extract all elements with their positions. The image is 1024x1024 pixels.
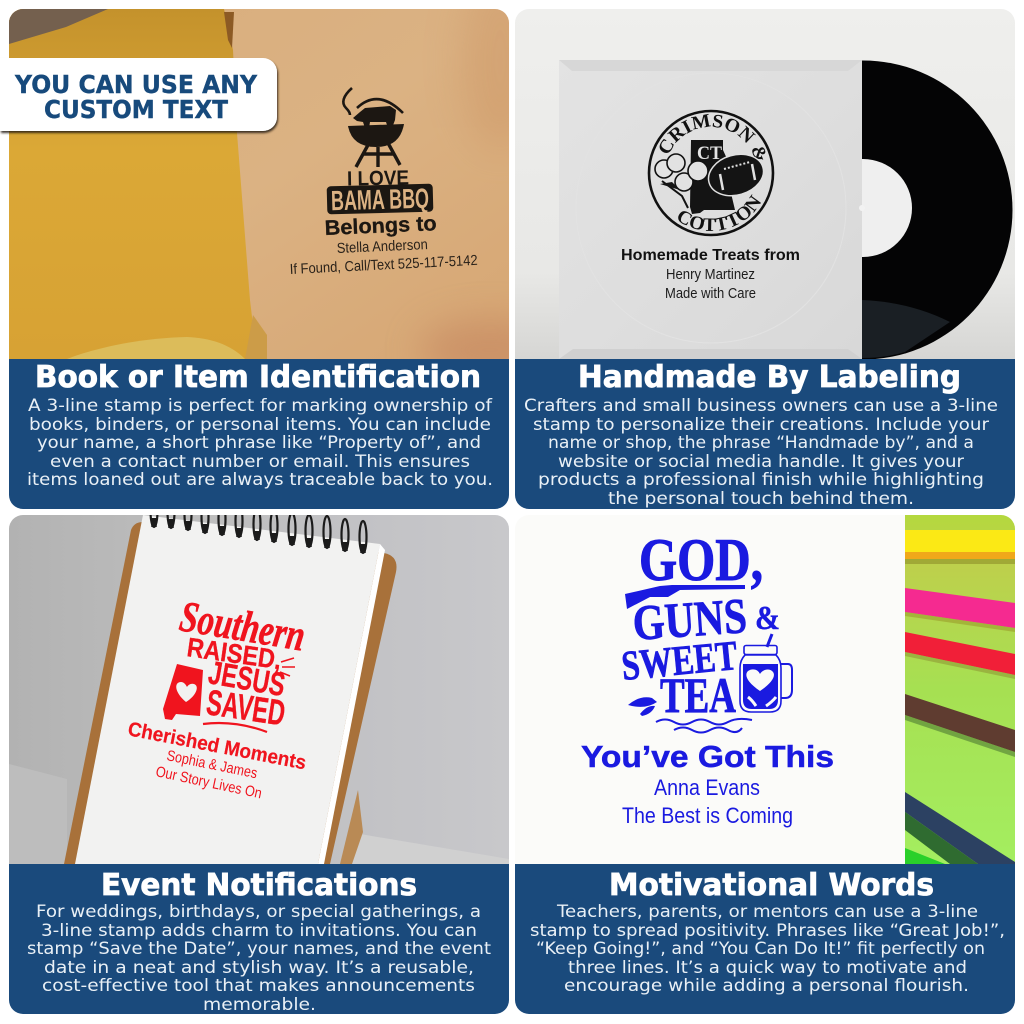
caption box: handmade by labeling: name or shop, the phrase “Handmade by”, and a [548,433,974,452]
stamp: phone line: If Found, Call/Text 525-117-5142 [289,253,478,278]
stamp: God Guns and Sweet Tea logo: SWEET [620,633,739,690]
caption box: motivational words: Teachers, parents, or mentors can use a 3-line [556,902,978,921]
stamp: Cherished Moments: Cherished Moments [126,718,308,774]
stamp: I LOVE: I LOVE [347,166,409,191]
stamp: Crimson and Cotton seal: CRIMSON & [660,114,766,160]
stamp: BBQ grill logo [343,88,404,167]
caption box: motivational words [515,864,1015,1014]
caption box: event notifications: For weddings, birthdays, or special gatherings, a [36,902,481,921]
caption box: event notifications: stamp “Save the Date”, your names, and the event [27,939,492,958]
caption box: handmade by labeling: Crafters and small business owners can use a 3-line [524,396,998,415]
stamp: Crimson and Cotton seal: COTTTON [678,194,761,231]
panel: handmade by labeling [515,9,1015,509]
caption box: motivational words: three lines. It’s a quick way to motivate and [568,958,967,977]
caption box: motivational words: stamp to spread positivity. Phrases like “Great Job!”, [530,921,1005,940]
stamp: Our Story Lives On: Our Story Lives On [154,763,263,802]
photo: white paper with coloured pencils [581,515,1015,864]
caption box: book or item identification: Book or Item Identification [35,360,481,395]
stamp: You've Got This: You’ve Got This [581,739,834,774]
stamp: Homemade Treats from: Homemade Treats from [621,247,800,264]
stamp: Southern Raised Jesus Saved logo [163,602,304,733]
caption box: handmade by labeling: stamp to personalize their creations. Include your [533,415,989,434]
stamp: The Best is Coming: The Best is Coming [622,803,793,828]
stamp: Crimson and Cotton seal: CT [697,143,722,164]
caption box: book or item identification: your name, a short phrase like “Property of”, and [37,433,481,452]
caption box: motivational words: encourage while adding a personal flourish. [564,976,969,995]
caption box: book or item identification [9,359,509,509]
stamp: Crimson and Cotton seal [648,110,774,236]
stamp: God Guns and Sweet Tea logo: & [755,600,780,637]
stamp: Made with Care: Made with Care [665,286,756,302]
stamp: Southern Raised Jesus Saved logo: Southern [176,592,309,661]
caption box: event notifications: 3-line stamp adds charm to invitations. You can [41,921,477,940]
photo: spiral notepad on wooden stand [9,495,509,864]
stamp: God Guns and Sweet Tea logo: TEA [660,667,736,723]
photo: vinyl record in sleeve [515,9,1015,359]
caption box: handmade by labeling [515,359,1015,509]
stamp: Stella Anderson: Stella Anderson [336,237,428,257]
panel: motivational words [515,515,1015,1014]
caption box: handmade by labeling: the personal touch behind them. [608,489,914,508]
caption box: handmade by labeling: website or social media handle. It gives your [558,452,964,471]
stamp: God Guns and Sweet Tea logo: GUNS [631,587,748,651]
caption box: event notifications: cost-effective tool that makes announcements [42,976,475,995]
caption box: event notifications: Event Notifications [101,868,417,903]
stamp: Sophia and James: Sophia & James [165,747,259,782]
stamp: God Guns and Sweet Tea logo: GOD, [639,527,763,593]
panel: book or item identification [0,9,509,509]
stamp: BAMA BBQ banner: BAMA BBQ [331,183,429,216]
caption box: motivational words: “Keep Going!”, and “You Can Do It!” fit perfectly on [536,939,985,958]
badge: custom text [0,58,277,131]
panel: event notifications [9,495,509,1014]
badge: custom text: YOU CAN USE ANY [14,70,257,99]
stamp: God Guns and Sweet Tea logo [620,527,792,732]
badge: custom text: CUSTOM TEXT [44,95,228,124]
caption box: book or item identification: items loaned out are always traceable back to you. [27,470,493,489]
caption box: event notifications: memorable. [203,995,316,1014]
stamp: Southern Raised Jesus Saved logo: SAVED [204,681,288,734]
stamp: Belongs to: Belongs to [324,212,437,240]
stamp: Southern Raised Jesus Saved logo: JESUS [206,653,288,703]
caption box: event notifications: date in a neat and stylish way. It’s a reusable, [44,958,474,977]
stamp: BAMA BBQ banner [327,183,433,216]
caption box: book or item identification: books, binders, or personal items. You can include [29,415,491,434]
caption box: book or item identification: even a contact number or email. This ensures [50,452,470,471]
caption box: event notifications [9,864,509,1014]
caption box: motivational words: Motivational Words [609,868,934,903]
stamp: Anna Evans: Anna Evans [654,775,760,800]
caption box: handmade by labeling: Handmade By Labeling [578,360,961,395]
caption box: handmade by labeling: products a professional finish while highlighting [538,470,984,489]
photo: aged paper with stamp [9,9,509,359]
stamp: Southern Raised Jesus Saved logo: RAISED, [185,632,283,675]
caption box: book or item identification: A 3-line stamp is perfect for marking ownership of [28,396,493,415]
stamp: Henry Martinez: Henry Martinez [666,267,755,283]
